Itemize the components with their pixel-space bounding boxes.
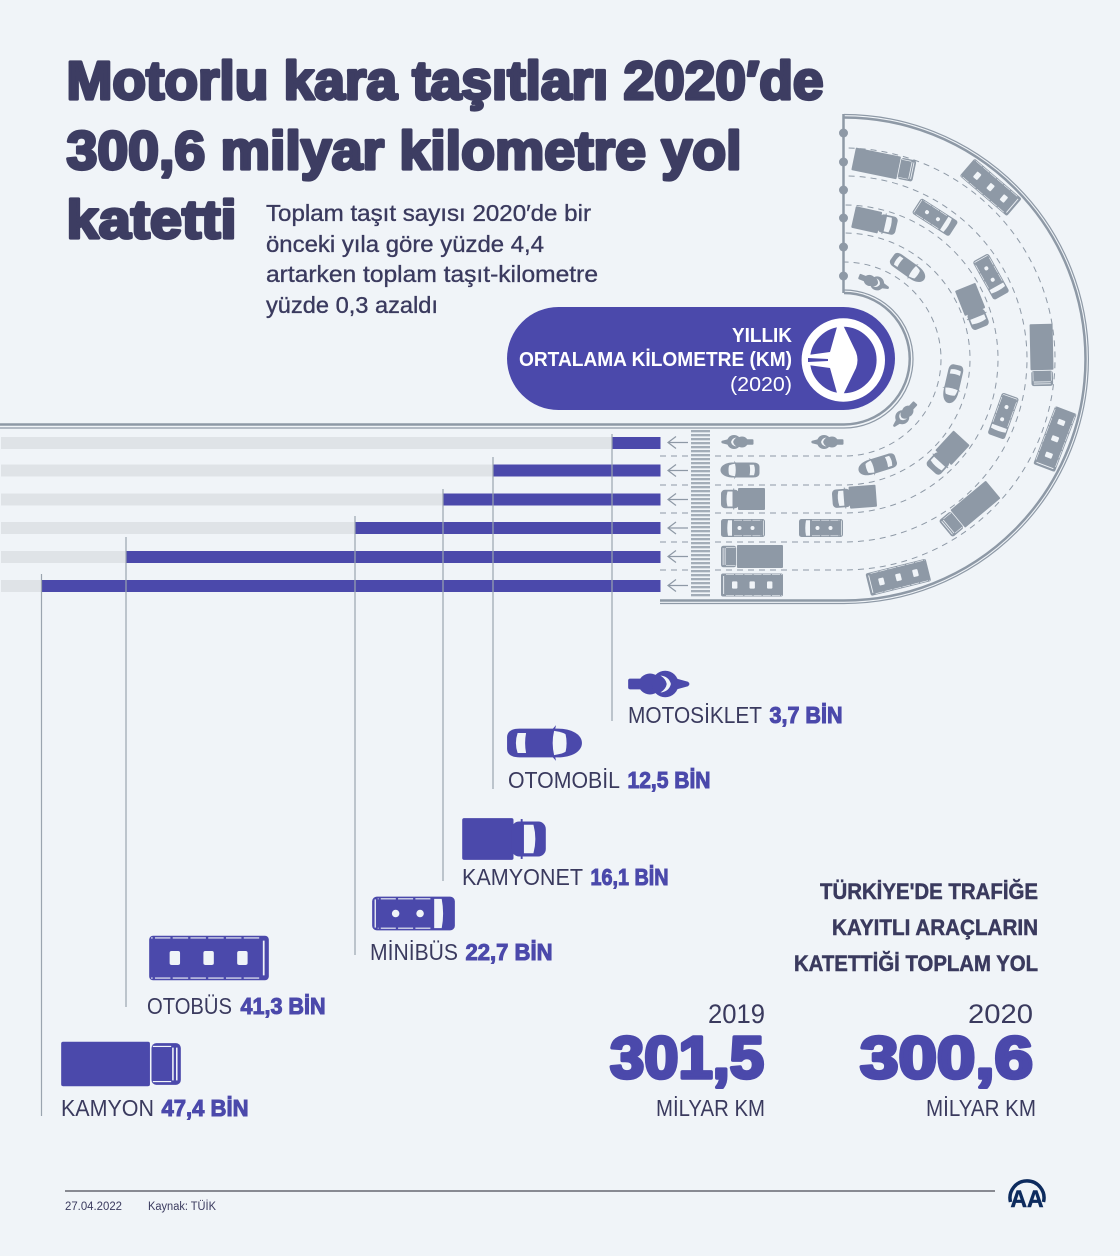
item: van: 16,1 BİN [590, 864, 668, 890]
bar chart: annual average km per vehicle type [1, 434, 660, 1116]
item: bus: OTOBÜS [147, 993, 232, 1019]
intro paragraph: yüzde 0,3 azaldı [266, 292, 438, 318]
intro paragraph: önceki yıla göre yüzde 4,4 [266, 231, 544, 257]
footer [65, 1191, 995, 1213]
item: truck: KAMYON [61, 1095, 154, 1121]
panel: annual average km badge: ORTALAMA KİLOMETRE (KM) [519, 348, 792, 371]
heading: total distance: KATETTİĞİ TOPLAM YOL [794, 951, 1038, 976]
item: motorcycle: MOTOSİKLET [628, 702, 762, 728]
item: car: 12,5 BİN [628, 767, 710, 793]
stat: 2019 total: 2019 [708, 999, 765, 1029]
footer: Kaynak: TÜİK [148, 1200, 216, 1213]
item: minibus [370, 897, 552, 965]
grey vehicles on the road [720, 148, 1077, 596]
heading: total distance: KAYITLI ARAÇLARIN [832, 915, 1038, 940]
panel: annual average km badge: (2020) [730, 374, 792, 396]
heading: total distance: TÜRKİYE'DE TRAFİĞE [820, 879, 1038, 904]
item: car [507, 725, 710, 793]
stat: 2019 total: 301,5 [610, 1025, 764, 1091]
item: truck [61, 1042, 248, 1121]
item: car: OTOMOBİL [508, 767, 620, 793]
stat: 2020 total: 2020 [968, 999, 1033, 1029]
icon: AA logo: AA [1010, 1186, 1044, 1213]
stat: 2020 total: 300,6 [860, 1025, 1033, 1091]
stat: 2020 total: MİLYAR KM [926, 1095, 1036, 1121]
title: Motorlu kara taşıtları 2020′de [66, 51, 824, 111]
icon: steering wheel [806, 322, 881, 398]
item: van: KAMYONET [462, 864, 583, 890]
item: bus [147, 936, 326, 1019]
heading: total distance [794, 879, 1038, 976]
item: minibus: 22,7 BİN [466, 939, 552, 965]
item: motorcycle [628, 671, 842, 728]
item: minibus: MİNİBÜS [370, 939, 458, 965]
arrows pointing left [668, 436, 688, 592]
intro paragraph: Toplam taşıt sayısı 2020′de bir [266, 200, 591, 226]
footer: 27.04.2022 [65, 1201, 122, 1213]
crosswalk [691, 430, 710, 597]
item: bus: 41,3 BİN [240, 993, 326, 1019]
panel: annual average km badge: YILLIK [732, 325, 793, 347]
title: katetti [66, 190, 237, 250]
item: van [462, 818, 668, 890]
intro paragraph [266, 200, 598, 318]
intro paragraph: artarken toplam taşıt-kilometre [266, 261, 598, 287]
panel: annual average km badge [507, 307, 895, 410]
title [66, 51, 824, 250]
title: 300,6 milyar kilometre yol [66, 121, 741, 181]
stat: 2020 total [860, 999, 1036, 1121]
item: motorcycle: 3,7 BİN [770, 702, 842, 728]
item: truck: 47,4 BİN [162, 1095, 248, 1121]
stat: 2019 total: MİLYAR KM [656, 1095, 765, 1121]
stat: 2019 total [610, 999, 765, 1121]
road diagram [0, 114, 1088, 604]
